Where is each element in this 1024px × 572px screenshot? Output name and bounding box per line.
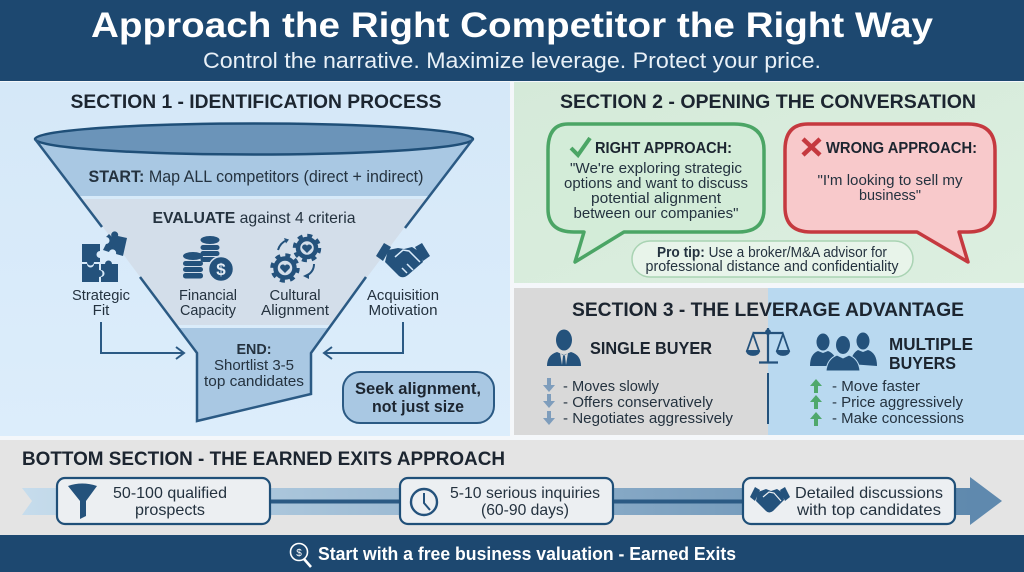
callout: seek alignment [343,372,494,423]
callout: seek alignment: Seek alignment, [355,380,481,398]
arrow: left to end [101,322,184,359]
funnel evaluate text: EVALUATE against 4 criteria [152,210,356,227]
icon: clock [411,489,437,515]
timeline arrow [22,477,1002,525]
right approach quote: potential alignment [591,190,722,207]
funnel start text: START: Map ALL competitors (direct + indirect) [88,168,424,186]
panel: section 3 leverage advantage [514,288,1024,435]
step 3 [743,478,955,524]
single buyer heading: SINGLE BUYER [590,338,712,358]
multiple buyers list: - Price aggressively [832,394,963,411]
pro tip: Pro tip: Use a broker/M&A advisor for [657,245,887,261]
wrong approach quote: business" [859,187,921,204]
panel: bottom section earned exits approach [0,440,1024,535]
wrong approach label: WRONG APPROACH: [826,140,977,157]
step 3: Detailed discussions [795,485,943,502]
panel: section 1 identification process [0,82,510,436]
multiple buyers list: - Make concessions [832,410,964,427]
icon: multiple buyers [810,332,877,371]
step 1 [57,478,270,524]
label: financial capacity: Financial [179,287,237,304]
wrong approach quote [818,172,963,204]
magnifier dollar sign: $ [296,548,302,559]
funnel end text: END: [236,341,272,358]
step 3: with top candidates [796,502,941,519]
speech bubble: right approach [548,124,764,262]
speech bubble: wrong approach [785,124,995,262]
step 2 [400,478,613,524]
single buyer list: - Negotiates aggressively [563,410,733,427]
panel: section 1 identification process: Alignment [261,302,330,319]
panel: section 2 opening the conversation [514,82,1024,283]
icon: cross mark [803,139,820,155]
icon: handshake small [750,487,790,512]
single buyer list [543,378,733,427]
single buyer list: - Offers conservatively [563,394,713,411]
step 2: 5-10 serious inquiries [450,485,600,502]
pro tip: professional distance and confidentiality [646,259,899,275]
icon: up arrows [810,379,822,426]
icon: single buyer [547,330,581,366]
step 1: 50-100 qualified [113,485,227,502]
icon: gears with hearts [272,236,320,281]
right approach quote: options and want to discuss [564,175,748,192]
right approach quote [564,160,748,222]
call to action: Start with a free business valuation - Earned Exits [318,544,736,564]
pro tip [632,241,913,277]
right approach quote: between our companies" [574,205,738,222]
multiple buyers heading: MULTIPLE [889,334,973,354]
right approach quote: "We're exploring strategic [570,160,743,177]
arrow: right to end [324,322,403,359]
icon: magnifier with dollar [290,544,311,567]
funnel [35,124,473,421]
icon: puzzle [82,231,127,282]
label: cultural alignment: Cultural [270,287,320,304]
icon: coins [183,236,234,282]
panel: section 1 identification process: Capacity [180,302,236,319]
step 1: prospects [135,502,205,519]
section 3 heading: SECTION 3 - THE LEVERAGE ADVANTAGE [572,299,964,321]
multiple buyers list [810,378,964,427]
step 2: (60-90 days) [481,502,569,519]
callout: seek alignment: not just size [372,398,464,416]
subtitle: Control the narrative. Maximize leverage. Protect your price. [203,48,821,73]
header [0,0,1024,81]
single buyer list: - Moves slowly [563,378,659,395]
icon: down arrows [543,378,555,425]
section 2 heading: SECTION 2 - OPENING THE CONVERSATION [560,91,976,113]
panel: section 3 leverage advantage: BUYERS [889,353,956,373]
wrong approach quote: "I'm looking to sell my [818,172,963,189]
panel: section 1 identification process: Fit [93,302,110,319]
multiple buyers list: - Move faster [832,378,920,395]
divider [767,373,769,424]
funnel end text: Shortlist 3-5 [214,357,294,374]
icon: scales [747,328,789,362]
funnel end text [204,341,304,390]
right approach label: RIGHT APPROACH: [595,140,732,157]
label: strategic fit: Strategic [72,287,130,304]
funnel end text: top candidates [204,373,304,390]
title: Approach the Right Competitor the Right Way [91,6,934,45]
bottom heading: BOTTOM SECTION - THE EARNED EXITS APPROACH [22,448,505,470]
footer bar [0,535,1024,572]
icon: funnel [68,484,97,519]
section 1 heading: SECTION 1 - IDENTIFICATION PROCESS [70,91,442,113]
label: acquisition motivation: Acquisition [367,287,439,304]
icon: check mark [571,138,590,155]
panel: section 1 identification process: Motivation [368,302,438,319]
icon: handshake [376,243,430,277]
coin dollar sign: $ [216,260,226,279]
